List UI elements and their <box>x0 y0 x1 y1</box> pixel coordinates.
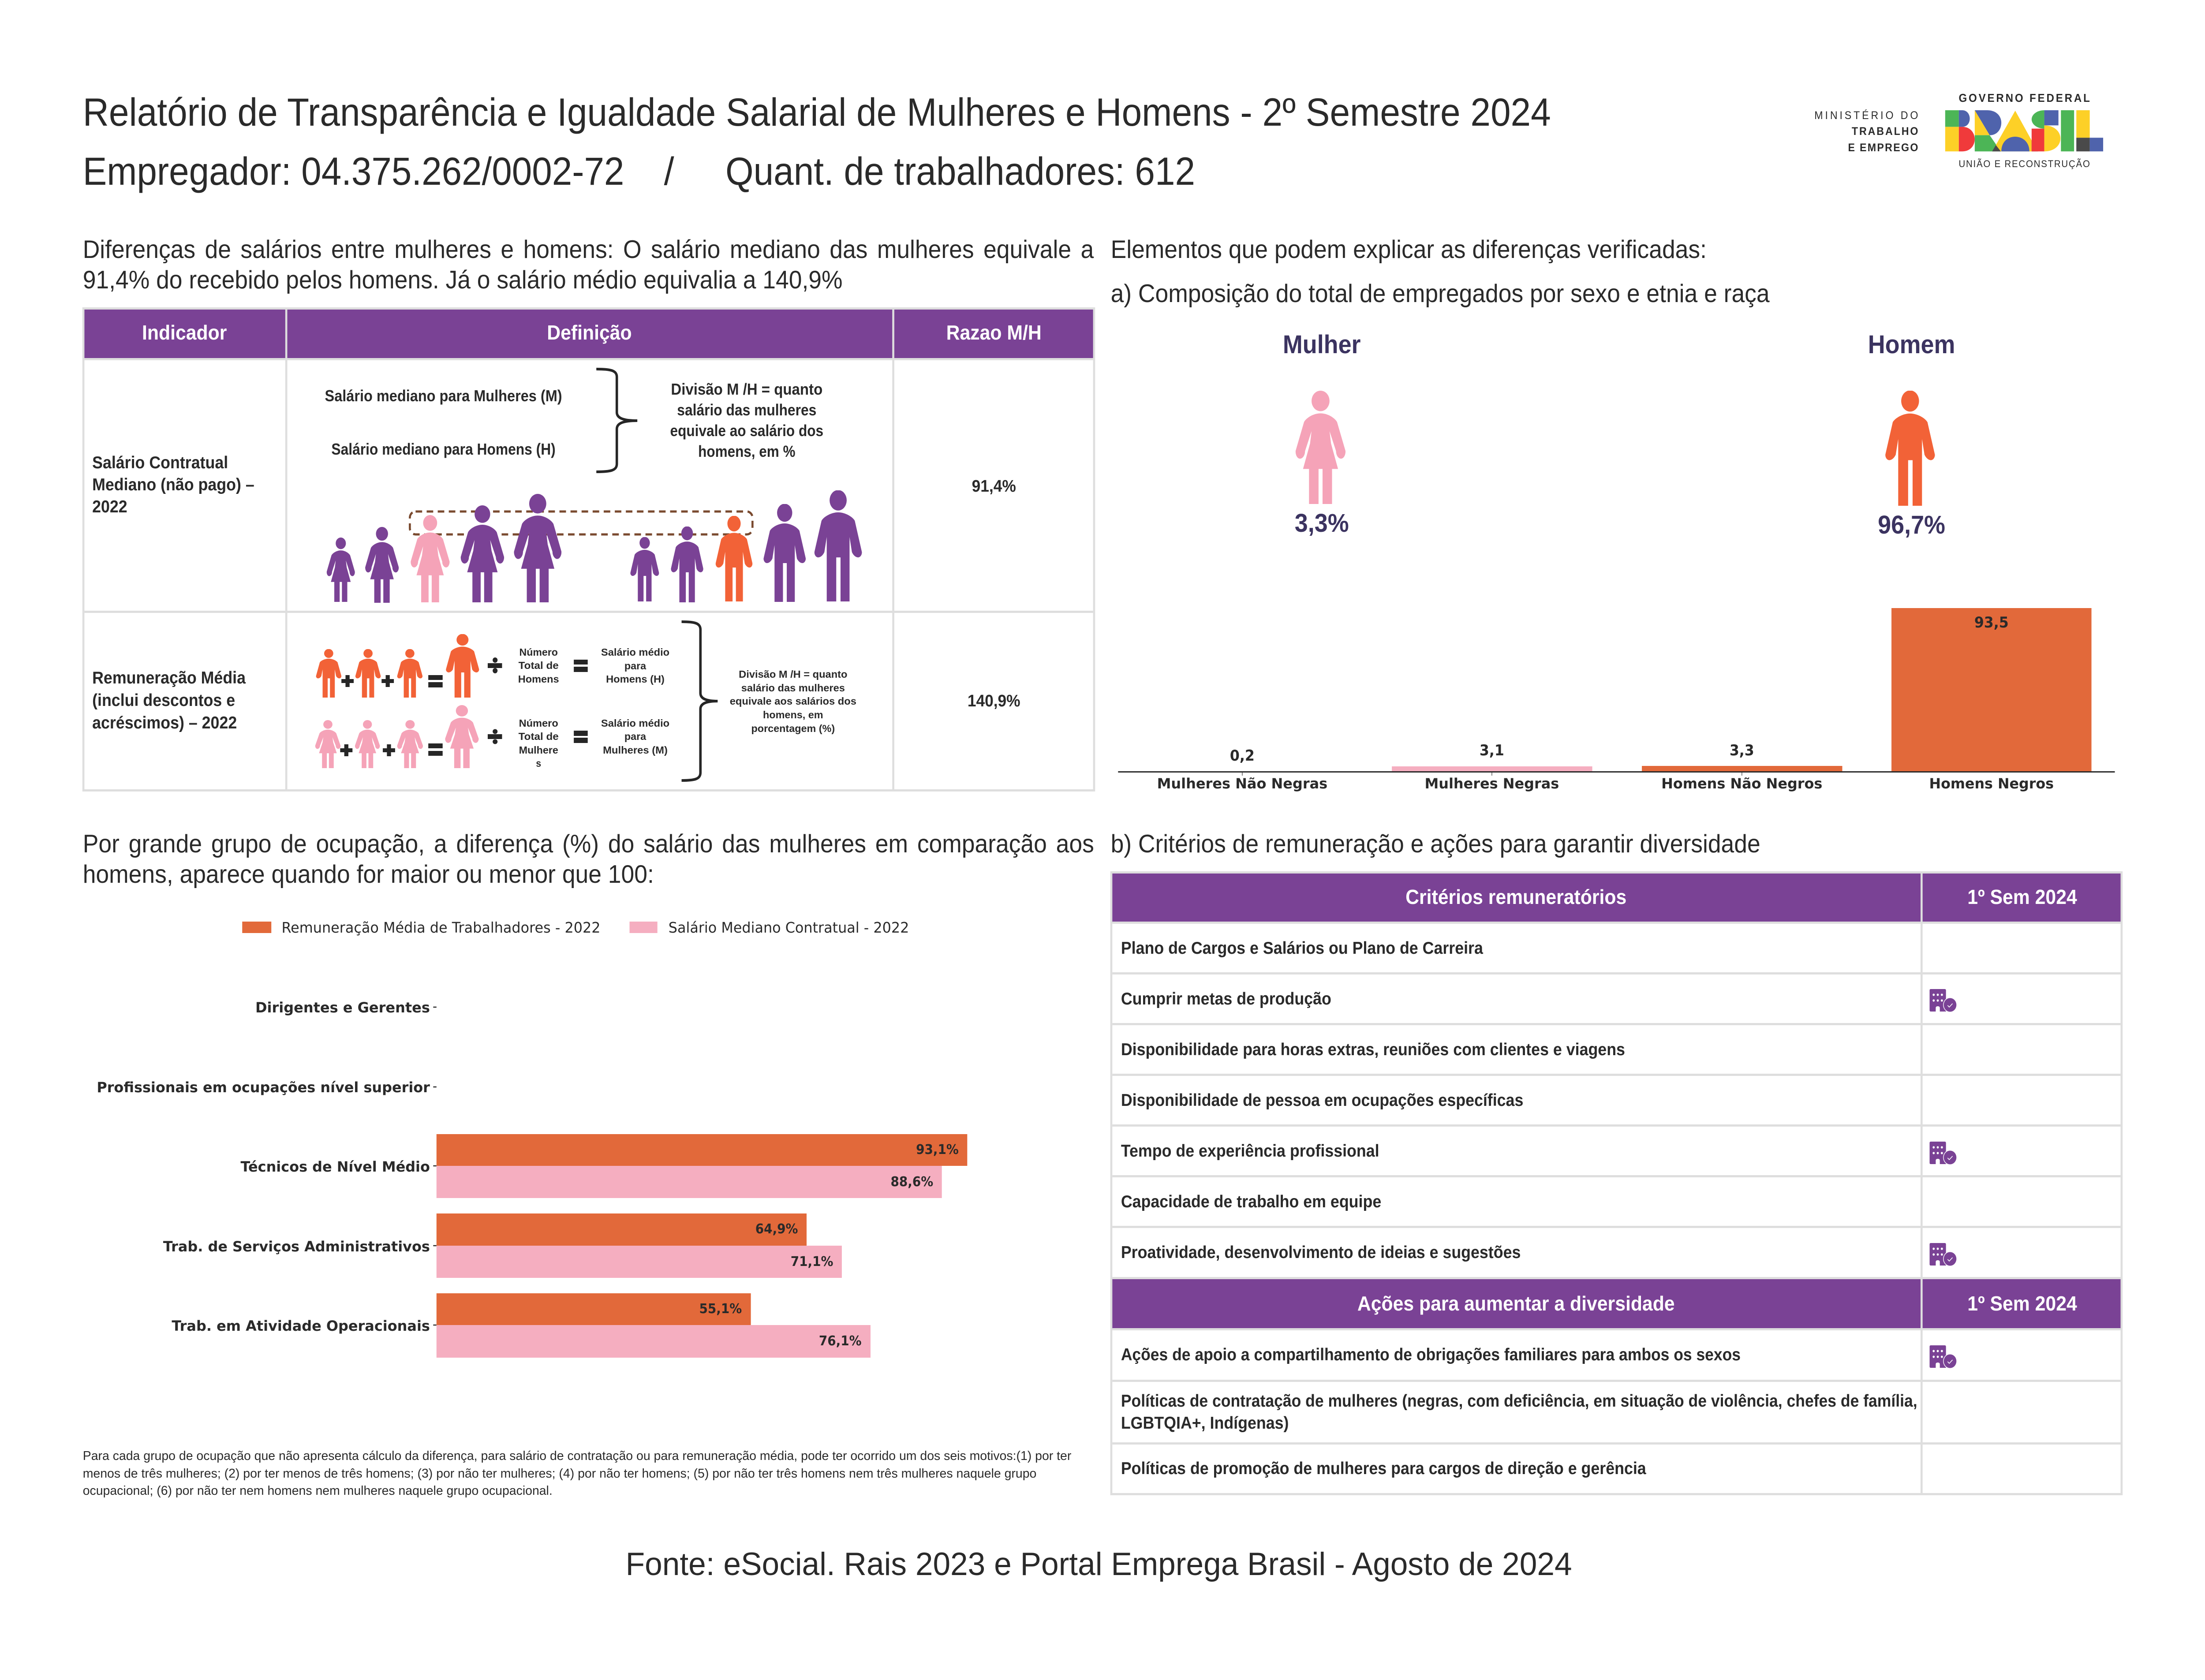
row label: average remuneration <box>92 668 246 732</box>
bar chart: sex and race composition: 3,1 <box>1480 742 1504 759</box>
logo: Governo Federal Brasil: UNIÃO E RECONSTRUÇÃO <box>1958 158 2090 169</box>
brace: median <box>596 369 637 472</box>
median division explanation: salário das mulheres <box>677 402 816 419</box>
average division explanation: Divisão M /H = quanto <box>739 668 847 680</box>
average division explanation: porcentagem (%) <box>751 723 835 734</box>
header: actions <box>1112 1278 2121 1329</box>
bar chart: sex and race composition: Homens Não Negros <box>1661 776 1822 792</box>
bars: serviços administrativos: 71,1% <box>791 1254 833 1269</box>
formula: women average: Salário médio <box>601 717 669 729</box>
icon: building check, family support <box>1929 1345 1957 1369</box>
panel: man share: 96,7% <box>1878 510 1945 539</box>
paragraph: occupation group: Por grande grupo de ocupação, a diferença (%) do salário das mulheres em comparação aos <box>83 829 1094 858</box>
bars: técnicos <box>437 1134 967 1198</box>
category labels: Trab. de Serviços Administrativos <box>163 1239 430 1255</box>
row texts: Tempo de experiência profissional <box>1121 1141 1379 1160</box>
header: criteria: 1º Sem 2024 <box>1967 886 2077 908</box>
footnote <box>83 1449 1071 1497</box>
table header: Definição <box>547 322 632 344</box>
median division explanation <box>670 381 823 460</box>
title: / <box>664 149 674 194</box>
formula: women average: Total de <box>519 731 559 742</box>
intro paragraph: salary differences: 91,4% do recebido pelos homens. Já o salário médio equivalia a 140,9% <box>83 265 843 294</box>
header: actions: Ações para aumentar a diversidade <box>1357 1293 1675 1315</box>
heading: criteria: b) Critérios de remuneração e ações para garantir diversidade <box>1111 829 1760 858</box>
panel: criteria table <box>1111 872 2122 1494</box>
row texts: Capacidade de trabalho em equipe <box>1121 1192 1381 1211</box>
legend: Remuneração Média de Trabalhadores - 2022 <box>281 919 601 936</box>
icon: building check, proactivity <box>1929 1243 1957 1266</box>
bar chart: sex and race composition: Mulheres Negras <box>1424 776 1559 792</box>
row label: average remuneration: Remuneração Média <box>92 668 246 687</box>
formula: men average: Número <box>519 646 558 658</box>
table header <box>84 310 1093 358</box>
average division explanation: equivale aos salários dos <box>730 695 856 707</box>
bar chart: sex and race composition <box>1118 608 2115 792</box>
row label: average remuneration: (inclui descontos e <box>92 691 235 709</box>
logo: Ministério do Trabalho e Emprego: TRABALHO <box>1852 125 1918 138</box>
bar chart: sex and race composition: 0,2 <box>1230 747 1255 764</box>
formula: women average: para <box>624 731 647 742</box>
median highlight box <box>410 511 752 534</box>
median definition labels: Salário mediano para Homens (H) <box>331 441 556 458</box>
footnote: menos de três mulheres; (2) por ter menos de três homens; (3) por não ter mulheres; (4) por não ter homens; (5) por não ter três homens nem três mulheres naquele grupo <box>83 1466 1036 1480</box>
bar chart: sex and race composition: 93,5 <box>1974 614 2009 631</box>
bar chart: sex and race composition: 3,3 <box>1730 742 1754 759</box>
bars: serviços administrativos <box>437 1213 842 1278</box>
bars: serviços administrativos: 64,9% <box>755 1221 798 1236</box>
icon: building check, experience <box>1929 1142 1957 1165</box>
row texts: Cumprir metas de produção <box>1121 989 1331 1008</box>
intro paragraph: salary differences <box>83 235 1094 294</box>
footnote: Para cada grupo de ocupação que não apresenta cálculo da diferença, para salário de contratação ou para remuneração média, pode ter ocorrido um dos seis motivos:(1) por ter <box>83 1449 1071 1463</box>
panel: man share <box>1868 330 1955 539</box>
median division explanation: homens, em % <box>698 443 795 460</box>
bars: técnicos: 93,1% <box>916 1142 959 1157</box>
legend: Salário Mediano Contratual - 2022 <box>669 919 909 936</box>
row label: median salary: 2022 <box>92 497 127 516</box>
title: Quant. de trabalhadores: 612 <box>725 149 1195 194</box>
category labels: Trab. em Atividade Operacionais <box>172 1318 430 1334</box>
row texts: Políticas de promoção de mulheres para cargos de direção e gerência <box>1121 1459 1646 1478</box>
value: median ratio: 91,4% <box>972 477 1016 495</box>
median division explanation: Divisão M /H = quanto <box>671 381 822 398</box>
title: Relatório de Transparência e Igualdade Salarial de Mulheres e Homens - 2º Semestre 2024 <box>83 90 1551 134</box>
row texts: LGBTQIA+, Indígenas) <box>1121 1413 1289 1432</box>
row texts: Ações de apoio a compartilhamento de obrigações familiares para ambos os sexos <box>1121 1345 1741 1364</box>
formula: women average: s <box>536 758 541 769</box>
category labels: Técnicos de Nível Médio <box>241 1159 430 1175</box>
source: Fonte: eSocial. Rais 2023 e Portal Emprega Brasil - Agosto de 2024 <box>626 1546 1572 1582</box>
paragraph: occupation group: homens, aparece quando for maior ou menor que 100: <box>83 860 654 888</box>
row label: median salary: Mediano (não pago) – <box>92 475 254 494</box>
category labels: Profissionais em ocupações nível superior <box>97 1079 430 1096</box>
people row: women ordered by salary <box>327 494 561 603</box>
formula: women average: Mulheres (M) <box>603 744 668 756</box>
formula: men average: para <box>624 660 647 672</box>
panel: man share: Homem <box>1868 330 1955 358</box>
panel: woman share: Mulher <box>1283 330 1361 358</box>
value: average ratio: 140,9% <box>968 691 1020 710</box>
row texts: Políticas de contratação de mulheres (negras, com deficiência, em situação de violência, chefes de família, <box>1121 1391 1917 1410</box>
people row: men ordered by salary <box>630 490 862 602</box>
average division explanation <box>730 668 856 734</box>
formula: men average: Homens (H) <box>606 673 665 685</box>
formula: men average: Salário médio <box>601 646 669 658</box>
header: criteria: Critérios remuneratórios <box>1405 886 1626 908</box>
bars: atividade operacional: 76,1% <box>819 1333 862 1348</box>
intro paragraph: salary differences: Diferenças de salários entre mulheres e homens: O salário mediano das mulheres equivale a <box>83 235 1094 263</box>
category labels: Dirigentes e Gerentes <box>255 1000 430 1016</box>
title: Empregador: 04.375.262/0002-72 <box>83 149 624 194</box>
heading: explanatory elements: Elementos que podem explicar as diferenças verificadas: <box>1111 235 1707 263</box>
logo: Ministério do Trabalho e Emprego: MINISTÉRIO DO <box>1814 109 1918 122</box>
panel: indicator table <box>83 309 1094 790</box>
panel: woman share <box>1283 330 1361 537</box>
formula: women average: Número <box>519 717 558 729</box>
heading: explanatory elements <box>1111 235 1770 307</box>
row label: median salary: Salário Contratual <box>92 453 228 472</box>
bar chart: sex and race composition: Homens Negros <box>1929 776 2054 792</box>
category labels <box>97 1000 430 1334</box>
icon: man <box>1885 390 1935 506</box>
bars: atividade operacional: 55,1% <box>699 1301 742 1316</box>
logo: Ministério do Trabalho e Emprego <box>1814 109 1918 154</box>
paragraph: occupation group <box>83 829 1094 888</box>
panel: woman share: 3,3% <box>1295 508 1349 537</box>
logo: Governo Federal Brasil <box>1945 92 2103 169</box>
legend <box>242 919 909 936</box>
icon: building check, production goals <box>1929 989 1957 1012</box>
median division explanation: equivale ao salário dos <box>670 422 823 440</box>
header: criteria <box>1112 874 2121 922</box>
average division explanation: salário das mulheres <box>741 682 845 694</box>
formula: men average: Total de <box>519 660 559 671</box>
footnote: ocupacional; (6) por não ter nem homens nem mulheres naquele grupo ocupacional. <box>83 1483 553 1497</box>
bar chart: occupation groups <box>97 1000 967 1358</box>
icon: woman <box>1296 391 1345 504</box>
average division explanation: homens, em <box>763 709 823 721</box>
table header: Indicador <box>142 322 227 344</box>
row label: median salary <box>92 453 254 516</box>
row texts: Proatividade, desenvolvimento de ideias e sugestões <box>1121 1243 1521 1262</box>
logo: Ministério do Trabalho e Emprego: E EMPREGO <box>1848 142 1918 154</box>
formula: women average: Mulhere <box>519 744 558 756</box>
median definition labels: Salário mediano para Mulheres (M) <box>325 388 562 405</box>
logo: Governo Federal Brasil: GOVERNO FEDERAL <box>1958 92 2090 105</box>
heading: explanatory elements: a) Composição do total de empregados por sexo e etnia e raça <box>1111 279 1770 307</box>
brace: average <box>682 622 718 780</box>
row texts: Disponibilidade de pessoa em ocupações específicas <box>1121 1090 1523 1109</box>
bars: técnicos: 88,6% <box>891 1174 933 1189</box>
formula: men average <box>316 634 669 698</box>
row texts <box>1121 938 1917 1478</box>
row texts: Disponibilidade para horas extras, reuniões com clientes e viagens <box>1121 1040 1625 1059</box>
table header: Razao M/H <box>946 322 1042 344</box>
bar chart: sex and race composition: Mulheres Não Negras <box>1157 776 1327 792</box>
row texts: Plano de Cargos e Salários ou Plano de Carreira <box>1121 938 1483 957</box>
row label: average remuneration: acréscimos) – 2022 <box>92 713 237 732</box>
formula: women average <box>315 705 669 769</box>
title <box>83 90 1551 194</box>
header: actions: 1º Sem 2024 <box>1967 1293 2077 1315</box>
formula: men average: Homens <box>518 673 559 685</box>
median definition labels <box>325 388 562 458</box>
bars: atividade operacional <box>437 1293 871 1358</box>
